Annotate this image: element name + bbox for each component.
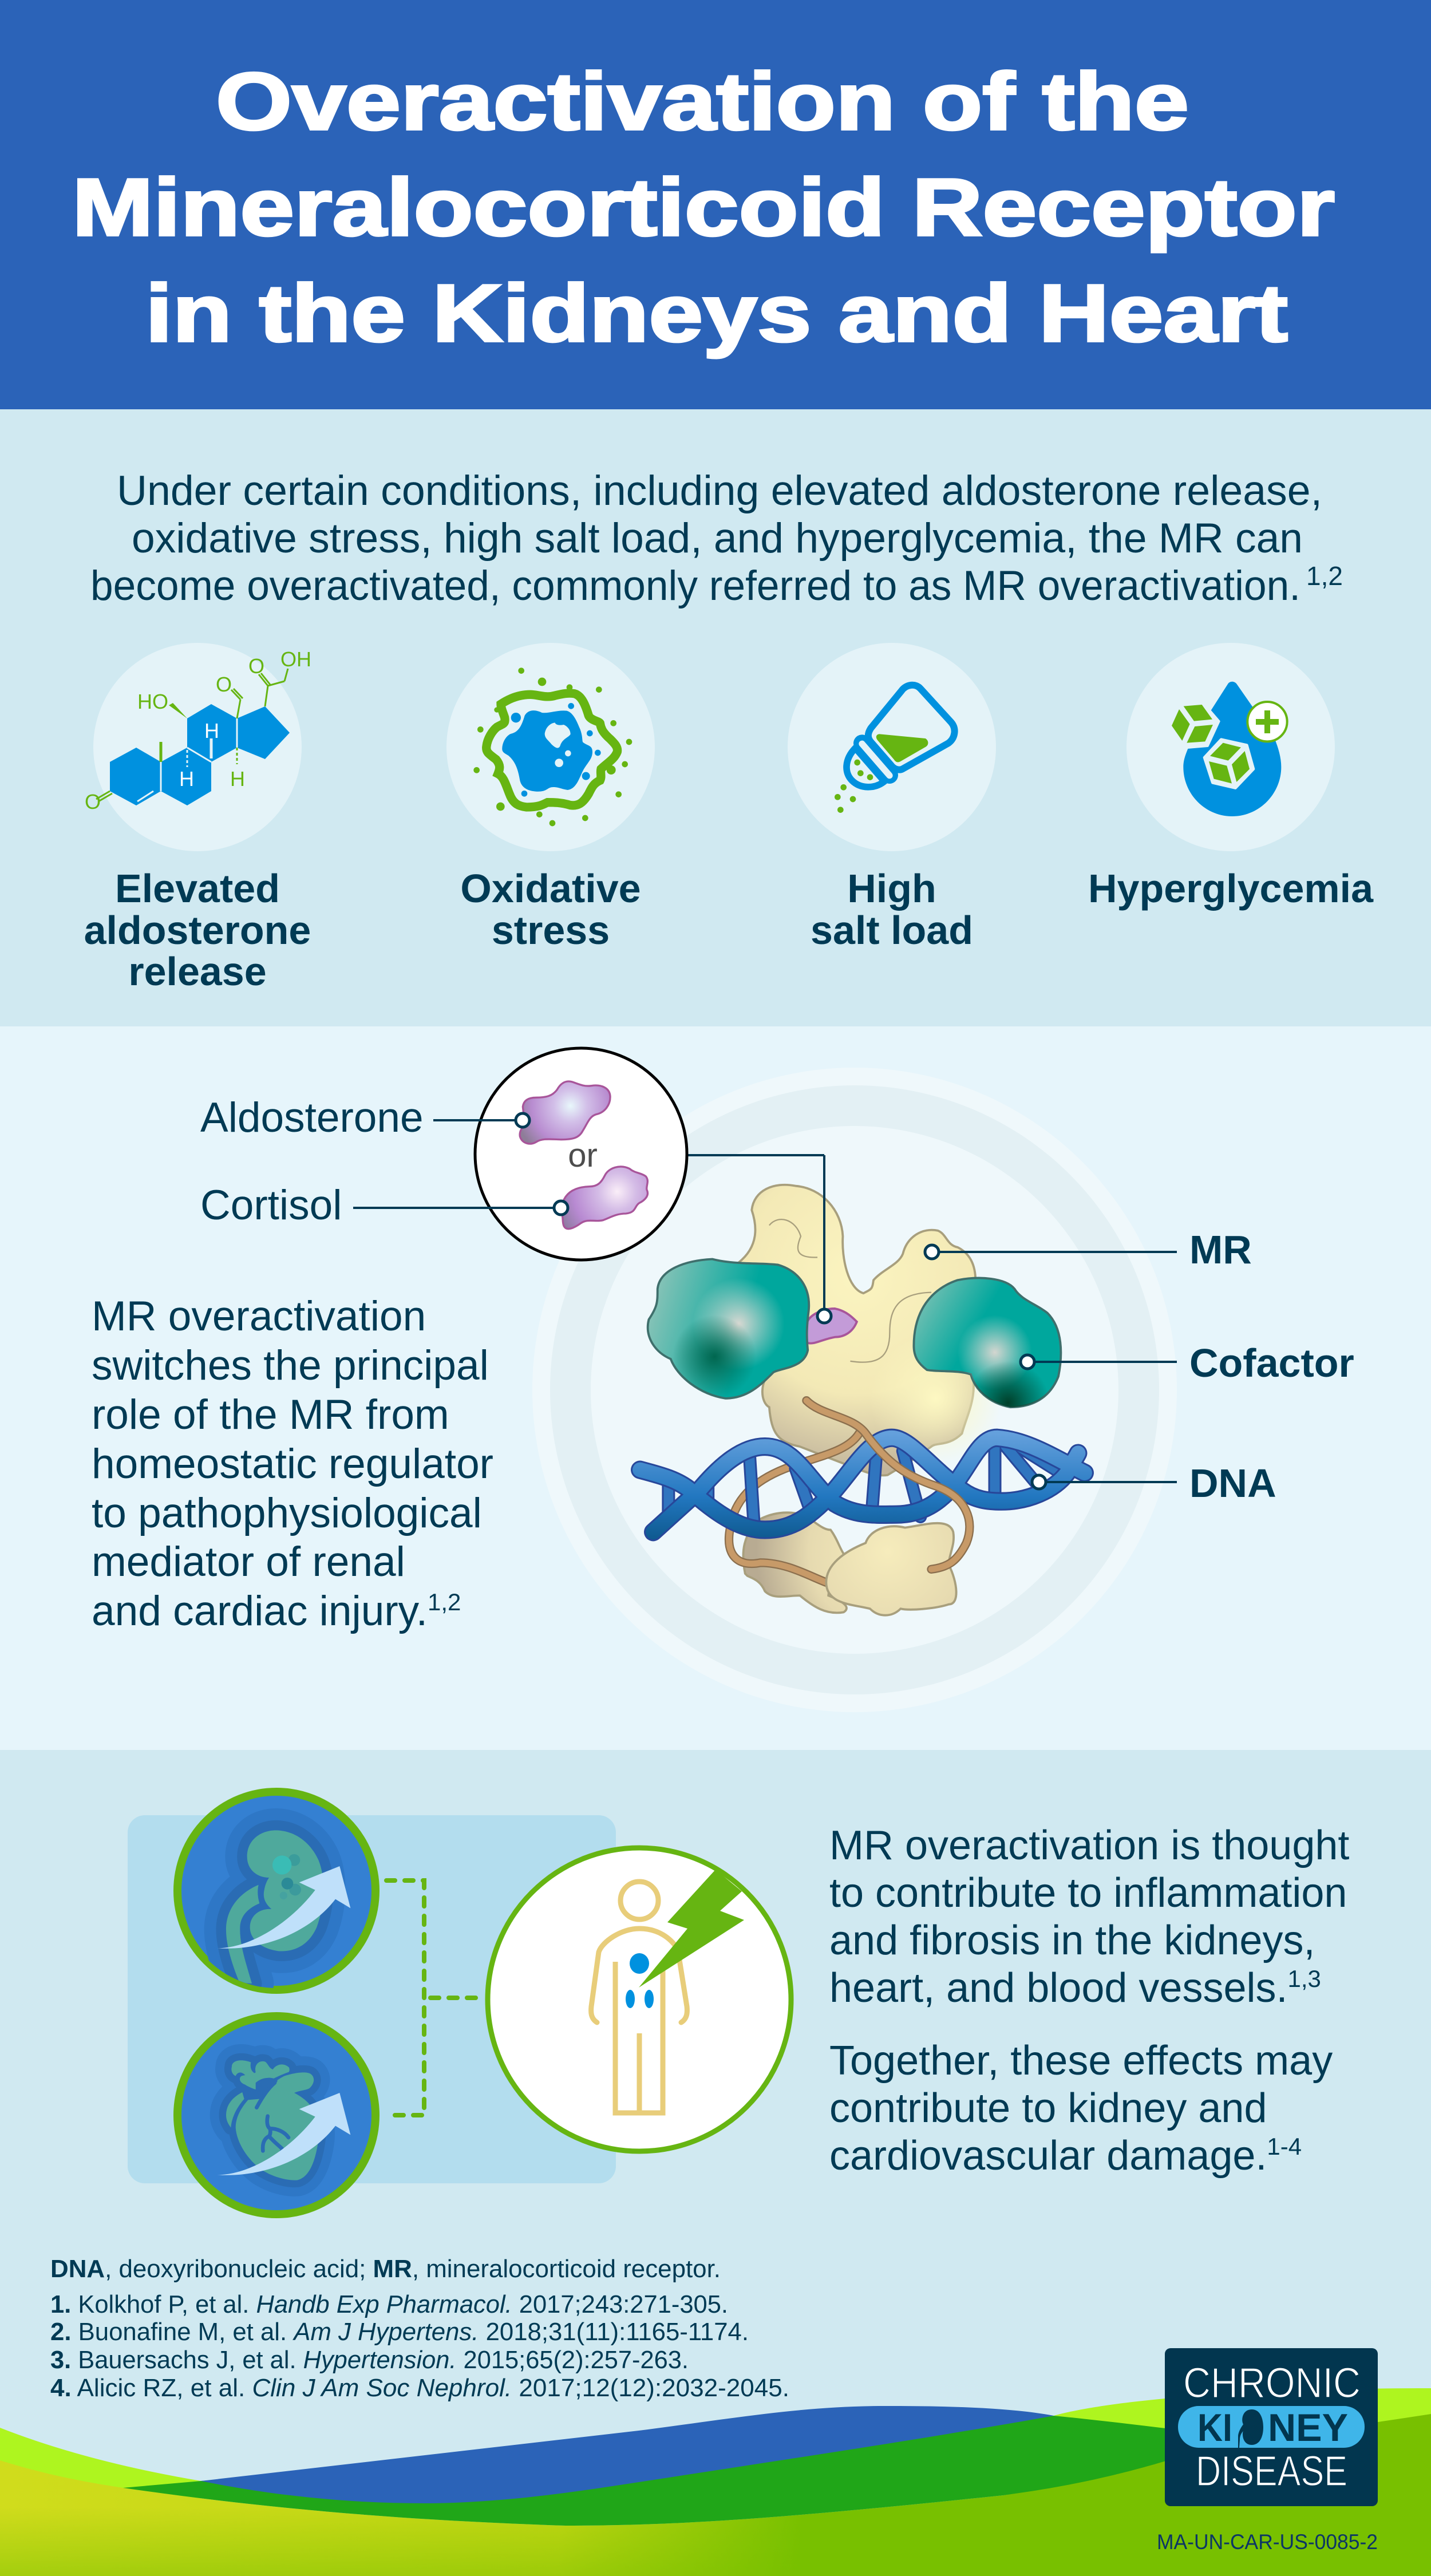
logo: Chronic Kidney Disease: CHRONIC <box>1183 2359 1361 2407</box>
label: cortisol <box>200 1182 568 1228</box>
text block: inflammation and fibrosis: and fibrosis in the kidneys, <box>829 1918 1315 1963</box>
text block: MR overactivation role: homeostatic regulator <box>92 1441 493 1487</box>
label: high salt load: High <box>847 866 936 911</box>
lightning bolt <box>639 1870 744 1988</box>
text block: inflammation and fibrosis: 1,3 <box>1288 1965 1321 1992</box>
ligand bound in pocket <box>807 1309 857 1344</box>
text block: MR overactivation role: mediator of renal <box>92 1539 405 1585</box>
icon: steroid molecule: O <box>248 654 264 678</box>
arrow: increase <box>218 2093 350 2175</box>
icon: oxidative stress cell <box>446 643 655 851</box>
aldosterone molecule <box>520 1081 610 1144</box>
icon: steroid molecule: H <box>204 719 219 742</box>
icon: kidney with arrow <box>177 1792 375 1990</box>
callout: aldosterone or cortisol inset <box>475 1048 824 1316</box>
panel: title banner <box>0 0 1431 409</box>
MR receptor body <box>738 1185 1001 1475</box>
label: hyperglycemia: Hyperglycemia <box>1088 866 1374 911</box>
icon: steroid molecule: OH <box>280 647 311 671</box>
label: high salt load: salt load <box>811 908 973 953</box>
icon: glucose drop <box>1126 643 1335 851</box>
icon: steroid molecule: HO <box>137 690 168 713</box>
lower protein right <box>826 1523 956 1615</box>
text block: MR overactivation role: MR overactivation <box>92 1293 426 1340</box>
text block: inflammation and fibrosis: MR overactivation is thought <box>829 1823 1349 1868</box>
lower protein left <box>743 1512 847 1613</box>
icon: heart with arrow <box>177 2016 375 2214</box>
text block: inflammation and fibrosis: heart, and blood vessels. <box>829 1965 1288 2011</box>
icon: salt shaker <box>788 643 996 851</box>
label: cofactor: Cofactor <box>1189 1341 1354 1385</box>
text block: abbreviations and references: 3. Bauersachs J, et al. Hypertension. 2015;65(2):257-263. <box>50 2346 689 2374</box>
text block: kidney and cardiovascular damage: cardiovascular damage. <box>829 2133 1267 2179</box>
icon: steroid molecule <box>85 643 311 851</box>
text block: MR overactivation role: and cardiac injury. <box>92 1588 428 1634</box>
title: in the Kidneys and Heart <box>145 268 1288 359</box>
label: oxidative stress: stress <box>492 908 610 953</box>
DNA helix <box>640 1438 1085 1532</box>
label: aldosterone: Aldosterone <box>200 1095 424 1141</box>
text block: introduction: oxidative stress, high salt load, and hyperglycemia, the MR can <box>132 515 1303 562</box>
text block: abbreviations and references: 4. Alicic RZ, et al. Clin J Am Soc Nephrol. 2017;12(12):2032-2045. <box>50 2374 789 2402</box>
icon: steroid molecule: O <box>216 673 232 696</box>
logo: Chronic Kidney Disease <box>1165 2348 1378 2506</box>
label: aldosterone <box>200 1095 529 1141</box>
logo: Chronic Kidney Disease: KI <box>1197 2406 1232 2449</box>
text block: MR overactivation role: to pathophysiological <box>92 1490 482 1536</box>
organs <box>626 1953 654 2008</box>
label: MR <box>925 1227 1252 1272</box>
text block: abbreviations and references: DNA, deoxyribonucleic acid; MR, mineralocorticoid receptor. <box>50 2255 721 2283</box>
callout: aldosterone or cortisol inset: or <box>568 1137 598 1174</box>
title: Overactivation of the <box>216 56 1189 147</box>
text block: MR overactivation role <box>92 1293 493 1634</box>
cortisol molecule <box>561 1167 647 1229</box>
text block: abbreviations and references <box>50 2255 789 2402</box>
body outline <box>591 1882 687 2113</box>
label: MR: MR <box>1189 1227 1252 1272</box>
label: DNA: DNA <box>1189 1461 1276 1506</box>
text block: abbreviations and references: 2. Buonafine M, et al. Am J Hypertens. 2018;31(11):1165-1174. <box>50 2318 749 2346</box>
title: Mineralocorticoid Receptor <box>72 162 1335 253</box>
icon: body with lightning bolt <box>488 1848 791 2151</box>
cofactor right <box>914 1278 1061 1407</box>
text block: MR overactivation role: role of the MR from <box>92 1392 449 1438</box>
text block: inflammation and fibrosis: to contribute to inflammation <box>829 1870 1347 1916</box>
logo: Chronic Kidney Disease: NEY <box>1268 2406 1348 2449</box>
concentric rings <box>532 1068 1177 1712</box>
text block: introduction: become overactivated, commonly referred to as MR overactivation. <box>90 563 1300 609</box>
label: cortisol: Cortisol <box>200 1182 342 1228</box>
text block: abbreviations and references: 1. Kolkhof P, et al. Handb Exp Pharmacol. 2017;243:271-305. <box>50 2290 728 2318</box>
title <box>72 56 1335 359</box>
illustration: MR protein with cofactors on DNA <box>640 1185 1085 1615</box>
label: DNA <box>1032 1461 1276 1506</box>
label: oxidative stress: Oxidative <box>460 866 641 911</box>
text block: inflammation and fibrosis <box>829 1823 1349 2011</box>
text block: introduction: 1,2 <box>1306 561 1343 591</box>
label: cofactor <box>1021 1341 1354 1385</box>
logo: Chronic Kidney Disease: DISEASE <box>1196 2447 1347 2495</box>
peptide strand in front of DNA <box>807 1401 970 1569</box>
text block: introduction: Under certain conditions, including elevated aldosterone release, <box>117 468 1322 514</box>
label: elevated aldosterone release <box>84 866 311 994</box>
cofactor left <box>648 1259 809 1398</box>
text block: MR overactivation role: 1,2 <box>428 1589 461 1615</box>
arrow: increase <box>218 1866 350 1949</box>
icon: steroid molecule: O <box>85 790 101 813</box>
peptide strand behind DNA <box>729 1433 859 1582</box>
text block: kidney and cardiovascular damage: Together, these effects may <box>829 2038 1333 2084</box>
label: oxidative stress <box>460 866 641 953</box>
icon: steroid molecule: H <box>230 767 245 791</box>
marker: ligand <box>817 1309 831 1323</box>
text block: kidney and cardiovascular damage <box>829 2038 1333 2179</box>
dashed connectors <box>386 1880 480 2115</box>
footer waves <box>0 2388 1431 2576</box>
text block: kidney and cardiovascular damage: contribute to kidney and <box>829 2085 1267 2131</box>
label: elevated aldosterone release: aldosterone <box>84 908 311 953</box>
text block: kidney and cardiovascular damage: 1-4 <box>1267 2133 1302 2160</box>
icon: steroid molecule: H <box>179 767 194 791</box>
label: elevated aldosterone release: Elevated <box>115 866 280 911</box>
label: high salt load <box>811 866 973 953</box>
text block: document code: MA-UN-CAR-US-0085-2 <box>1157 2530 1378 2554</box>
text block: introduction <box>90 468 1343 609</box>
panel: organ damage backdrop <box>128 1815 616 2183</box>
label: elevated aldosterone release: release <box>128 949 267 994</box>
text block: MR overactivation role: switches the principal <box>92 1342 489 1389</box>
